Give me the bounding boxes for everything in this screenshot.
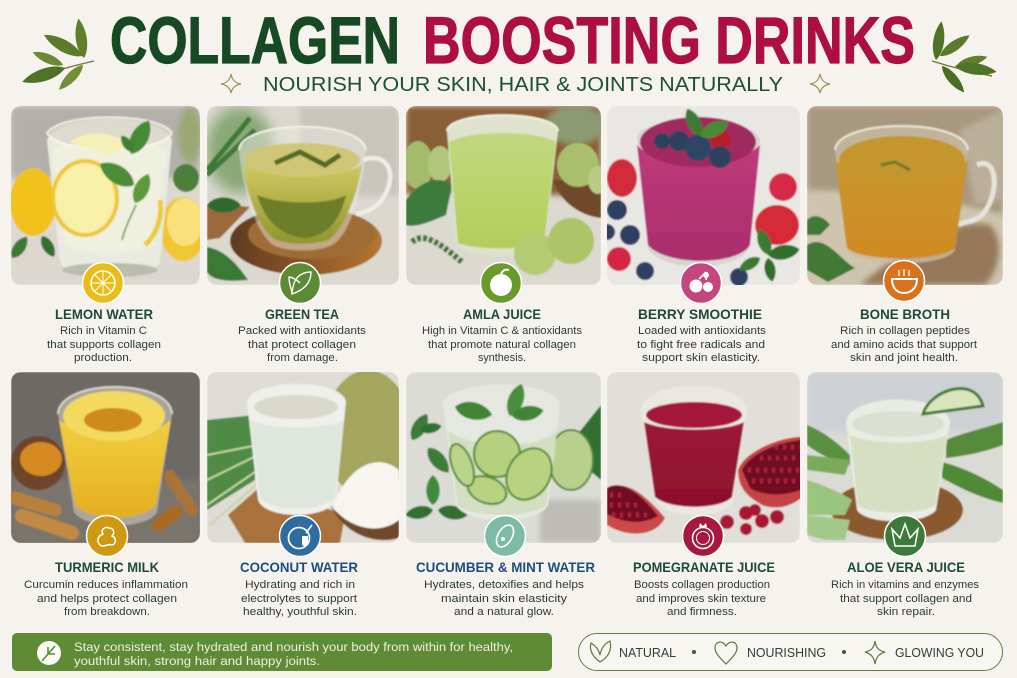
- photo: coconut water: [207, 370, 412, 543]
- description: and improves skin texture: [636, 593, 766, 605]
- description: skin repair.: [877, 606, 935, 618]
- panel: turmeric milk: [11, 372, 200, 618]
- description: Packed with antioxidants: [238, 325, 367, 337]
- description: [831, 579, 979, 618]
- badge: berries: [680, 262, 722, 304]
- description: that supports collagen: [47, 339, 161, 351]
- description: that promote natural collagen: [428, 339, 576, 351]
- description: Boosts collagen production: [634, 579, 770, 591]
- badge: leaf: [280, 262, 320, 304]
- icon: heart: [715, 642, 737, 664]
- description: Rich in Vitamin C: [60, 325, 147, 337]
- description: [238, 325, 367, 364]
- title: [110, 3, 915, 77]
- description: to fight free radicals and: [637, 339, 765, 351]
- description: that protect collagen: [248, 339, 356, 351]
- description: Loaded with antioxidants: [638, 325, 767, 337]
- description: skin and joint health.: [850, 352, 958, 364]
- panel: coconut water: [207, 370, 412, 618]
- description: Rich in vitamins and enzymes: [831, 579, 979, 591]
- tip text: [74, 640, 513, 668]
- description: [24, 579, 188, 618]
- photo: bone broth: [807, 106, 1003, 285]
- description: healthy, youthful skin.: [243, 606, 357, 618]
- icon: natural leaf: [590, 641, 611, 662]
- description: Hydrates, detoxifies and helps: [424, 579, 585, 591]
- subtitle: NOURISH YOUR SKIN, HAIR & JOINTS NATURALLY: [263, 74, 783, 96]
- tagline pill: [578, 634, 1002, 670]
- label: nourishing: NOURISHING: [747, 646, 826, 660]
- description: [422, 325, 583, 364]
- description: [637, 325, 767, 364]
- heading: CUCUMBER & MINT WATER: [416, 559, 595, 575]
- badge: amla: [480, 262, 522, 304]
- description: electrolytes to support: [241, 593, 357, 605]
- badge: aloe: [884, 516, 926, 556]
- panel: bone broth: [807, 106, 1003, 364]
- description: maintain skin elasticity: [441, 593, 568, 605]
- panel: green tea: [206, 106, 399, 364]
- heading: TURMERIC MILK: [55, 559, 159, 575]
- tip text: youthful skin, strong hair and happy joints.: [74, 654, 320, 668]
- photo: amla juice: [403, 105, 608, 285]
- icon: sparkle left: [221, 74, 241, 93]
- panel: lemon water: [7, 106, 206, 364]
- tip text: Stay consistent, stay hydrated and nourish your body from within for healthy,: [74, 640, 513, 654]
- description: synthesis.: [478, 352, 526, 364]
- photo: cucumber mint: [404, 372, 601, 543]
- heading: LEMON WATER: [55, 306, 153, 322]
- photo: lemon water: [7, 106, 206, 285]
- description: and helps protect collagen: [37, 593, 177, 605]
- description: [424, 579, 585, 618]
- description: High in Vitamin C & antioxidants: [422, 325, 583, 337]
- icon: sparkle: [865, 641, 885, 664]
- description: [47, 325, 161, 364]
- icon: sparkle right: [810, 74, 830, 93]
- heading: GREEN TEA: [265, 306, 339, 322]
- description: Rich in collagen peptides: [840, 325, 971, 337]
- description: [831, 325, 977, 364]
- photo: pomegranate: [607, 372, 805, 543]
- description: support skin elasticity.: [642, 352, 760, 364]
- header: [20, 3, 997, 96]
- heading: COCONUT WATER: [240, 559, 358, 575]
- panel: berry smoothie: [599, 106, 801, 364]
- description: from breakdown.: [64, 606, 150, 618]
- badge: lemon: [82, 262, 124, 304]
- icon: leaf in circle: [37, 641, 61, 665]
- heading: BERRY SMOOTHIE: [638, 306, 762, 322]
- description: from damage.: [267, 352, 338, 364]
- badge: bowl: [884, 260, 924, 302]
- icon: right leaf sprig: [931, 21, 997, 95]
- heading: POMEGRANATE JUICE: [633, 559, 775, 575]
- heading: AMLA JUICE: [463, 306, 541, 322]
- callout: tip banner: [12, 633, 552, 671]
- panel: aloe vera juice: [807, 372, 1003, 618]
- heading: ALOE VERA JUICE: [847, 559, 965, 575]
- description: and amino acids that support: [831, 339, 977, 351]
- description: [241, 579, 357, 618]
- description: and a natural glow.: [454, 606, 554, 618]
- description: Hydrating and rich in: [245, 579, 355, 591]
- description: Curcumin reduces inflammation: [24, 579, 188, 591]
- heading: BONE BROTH: [860, 306, 950, 322]
- photo: berry smoothie: [599, 106, 801, 286]
- photo: turmeric milk: [11, 372, 200, 543]
- badge: coconut: [280, 516, 320, 556]
- description: and firmness.: [667, 606, 737, 618]
- icon: left leaf sprig: [20, 18, 94, 93]
- panel: amla juice: [403, 105, 608, 364]
- label: glowing you: GLOWING YOU: [895, 646, 984, 660]
- panel: cucumber and mint water: [404, 372, 601, 618]
- label: natural: NATURAL: [619, 646, 676, 660]
- photo: green tea: [206, 106, 399, 285]
- badge: cucumber: [484, 516, 526, 556]
- description: production.: [74, 352, 132, 364]
- description: [634, 579, 770, 618]
- badge: ginger: [86, 516, 128, 556]
- badge: pomegranate: [682, 516, 724, 556]
- photo: aloe vera: [807, 372, 1003, 543]
- description: that support collagen and: [840, 593, 972, 605]
- title: COLLAGEN: [110, 3, 400, 77]
- panel: pomegranate juice: [607, 372, 805, 618]
